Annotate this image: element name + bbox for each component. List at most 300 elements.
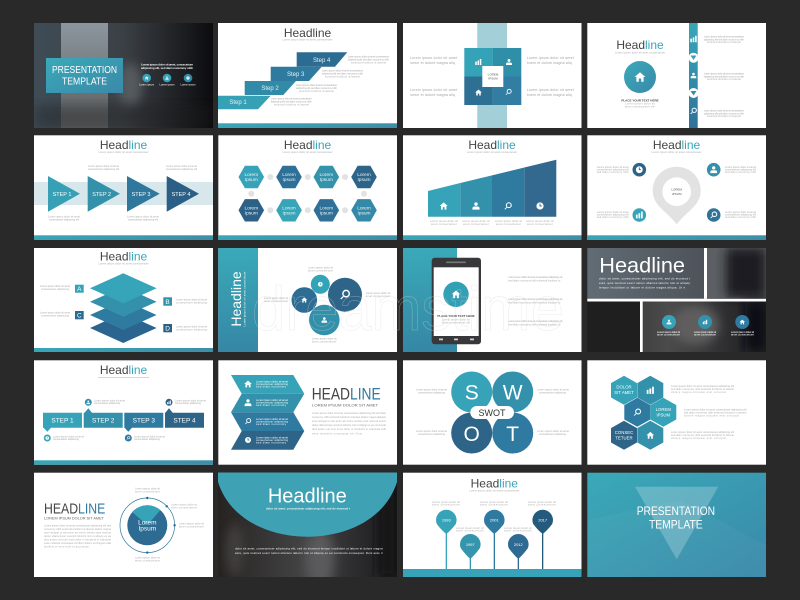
slide 11: phone mockup — [403, 248, 582, 352]
intro text: adipiscing elit, sed diam nonummy nibh — [141, 66, 193, 70]
captions — [671, 384, 747, 440]
paragraph: tation ullamcorper suscipit lobortis nisl ut aliquip ex ea — [44, 534, 112, 538]
paragraph: tation ullamcorper suscipit lobortis nisl ut aliquip ex ea commodo — [312, 423, 387, 427]
side text: Lorem ipsum dolor sit amet — [725, 210, 756, 214]
captions: amet consectetuer — [312, 340, 337, 344]
pin 1997: 1997 — [466, 542, 476, 547]
pin 1993 — [436, 510, 457, 569]
step captions: adipiscing elit sed diam nonummy nibh — [271, 100, 312, 104]
connector dots — [248, 174, 367, 213]
slide 8: map pin — [587, 135, 766, 240]
step 3 triangle: STEP 3 — [132, 192, 150, 198]
pin 2012: 2012 — [514, 542, 524, 547]
step 1 box: STEP 1 — [51, 418, 74, 425]
chevrons: Lorem ipsum dolor sit amet — [256, 380, 288, 384]
step 2 triangle — [88, 176, 120, 212]
captions: consectetuer adipiscing — [41, 314, 70, 318]
step 4 — [297, 52, 347, 67]
step captions — [53, 398, 206, 441]
side text: Lorem ipsum dolor sit amet consectetuer adipiscing elit — [508, 297, 563, 301]
headline panel: anis, quis nostrud exerc tation ullamco laboris nisi ut aliquip — [599, 281, 690, 285]
side text: lorem et dolore magna aliq — [527, 93, 572, 97]
captions: dolore magna aliquam erat volutpat — [671, 390, 726, 394]
captions: amet consectetuer — [264, 299, 288, 303]
headline: Headline — [471, 476, 518, 490]
chevrons: sed diam nonummy — [256, 422, 287, 426]
white dividers — [587, 248, 766, 352]
slide 19: year pins timeline — [403, 473, 582, 577]
side captions: consectetuer adipiscing — [539, 390, 567, 394]
step captions: euismod tincidunt ut laoreet — [299, 89, 334, 93]
phone: amet consectetuer elit — [442, 320, 470, 324]
step captions: euismod tincidunt ut laoreet — [351, 60, 386, 64]
side text: euismod tincidunt ut laoreet — [707, 114, 741, 118]
hexagons: Ipsum — [357, 177, 371, 183]
quadrant block — [464, 48, 521, 105]
side text — [508, 275, 563, 326]
step captions: Lorem ipsum dolor sit amet — [48, 214, 80, 218]
captions: amet consectetuer — [179, 524, 204, 528]
slide 4: home circle with side band — [587, 23, 766, 128]
teal arc headline: Headline — [268, 486, 347, 508]
icon: search — [707, 208, 720, 222]
side text: sed diam nonummy nibh euismod tincidunt ut — [508, 300, 561, 304]
step captions: Lorem ipsum dolor sit amet consectetuer — [322, 68, 363, 72]
step 3 — [271, 67, 322, 81]
captions: sed diam nonummy nibh euismod tincidunt ut laoreet — [671, 433, 734, 437]
step 2 — [245, 81, 296, 95]
side text: euismod tincidunt ut laoreet — [707, 77, 741, 81]
headline: Headline — [468, 138, 516, 152]
O circle — [451, 412, 492, 454]
icon: person — [707, 163, 720, 176]
hexagons: Ipsum — [357, 210, 371, 216]
icons row: Lorem ipsum — [180, 82, 196, 86]
pin captions — [432, 500, 556, 532]
slide 1: presentation template cover — [34, 23, 213, 128]
slide 13: step timeline — [34, 360, 213, 465]
home circle — [624, 61, 656, 93]
watermark: dreamstime — [252, 275, 564, 344]
side text: Lorem ipsum dolor sit amet consectetuer — [704, 108, 744, 112]
body text: anis, quis nostrud exerc tation ullamco laboris nisi ut aliquip ex ea commodo consequat. Duis aute ir — [235, 551, 383, 555]
side text: Lorem ipsum dolor sit amet — [725, 165, 756, 169]
slide 2: stair steps — [218, 23, 397, 128]
captions: consectetuer adipiscing — [176, 328, 208, 332]
headline panel — [587, 248, 704, 299]
hexagons: Lorem — [319, 172, 333, 178]
icon captions: amet consectetuer — [694, 332, 716, 336]
pin 2001: 2001 — [490, 518, 500, 522]
chevrons — [231, 375, 304, 450]
hexagons: Ipsum — [245, 177, 258, 183]
icon captions: amet consectetuer — [657, 332, 680, 336]
icon captions: Lorem ipsum dolor sit — [657, 330, 680, 334]
label C: C — [77, 312, 82, 320]
captions: Lorem ipsum dolor sit amet — [176, 324, 207, 328]
icons row — [139, 74, 196, 86]
captions: Lorem ipsum dolor sit — [462, 219, 490, 223]
captions: sed diam nonummy nibh euismod tincidunt ut laoreet — [684, 410, 747, 414]
headline panel: tempor incididunt ut labore et dolore magna aliqua. Ut e — [599, 286, 685, 290]
paragraph: duis autem vel eum iriure dolor in hendrerit in vulputate velit — [312, 427, 386, 431]
W circle: W — [503, 382, 523, 404]
step icons — [44, 399, 172, 442]
captions: Lorem ipsum dolor sit — [308, 266, 333, 270]
step captions: consectetuer adipiscing — [134, 437, 161, 441]
side captions: Lorem ipsum dolor sit amet — [416, 429, 447, 433]
captions: amet consectetuer — [171, 506, 197, 510]
step 2 triangle: STEP 2 — [92, 192, 111, 198]
hexagons: Lorem — [357, 172, 371, 178]
icon captions — [657, 330, 754, 336]
diamond stack — [90, 273, 157, 343]
headline: HEADLINE — [312, 385, 381, 403]
vertical icon band — [688, 23, 698, 128]
paragraph: esse molestie consequat vel illum — [312, 432, 362, 436]
captions: amet consectetuer — [527, 222, 553, 226]
side text: lorem et dolore magna aliq — [410, 61, 455, 65]
chevrons: Lorem ipsum dolor sit amet — [256, 417, 288, 421]
title box — [46, 58, 123, 93]
side text: Lorem ipsum dolor sit amet — [527, 88, 574, 92]
step captions: Lorem ipsum dolor sit amet consectetuer — [348, 54, 389, 58]
pin 2001 — [484, 510, 505, 569]
pin 1993: 1993 — [442, 518, 452, 522]
paragraph: nonummy nibh euismod tincidunt ut laoreet dolore magna — [44, 527, 112, 531]
captions: Lorem ipsum dolor sit — [366, 291, 390, 295]
caption: PLACE YOUR TEXT HERE — [621, 98, 659, 102]
side captions: consectetuer adipiscing — [418, 390, 446, 394]
captions: amet consectetuer — [431, 222, 457, 226]
side captions: Lorem ipsum dolor sit amet — [537, 429, 569, 433]
icon captions: amet consectetuer — [731, 332, 754, 336]
step captions: adipiscing elit sed diam nonummy nibh — [348, 58, 390, 62]
rising bars — [428, 160, 556, 217]
T circle: T — [506, 423, 519, 446]
side text — [704, 34, 745, 118]
headline: Lorem ipsum dolor sit amet consectetuer — [98, 262, 149, 266]
icon: person — [662, 315, 676, 329]
label C — [75, 311, 84, 320]
label A: A — [77, 286, 82, 293]
step 1 triangle — [48, 176, 80, 212]
captions: consectetuer adipiscing — [176, 300, 208, 304]
headline: Headline — [100, 138, 148, 152]
side text: Lorem ipsum dolor sit amet — [597, 210, 629, 214]
paragraph: erat volutpat ut wisi enim ad minim veniam quis nostrud exerci — [312, 419, 386, 423]
side panel — [218, 248, 258, 352]
quadrant block: LOREM — [488, 72, 499, 76]
step captions: Lorem ipsum dolor sit amet — [134, 434, 165, 438]
closing title: TEMPLATE — [649, 517, 703, 531]
step 2 box: STEP 2 — [92, 418, 115, 425]
ring and pie: Lorem — [138, 519, 157, 526]
honeycomb: TETUER — [615, 436, 633, 440]
step captions: adipiscing elit sed diam nonummy nibh — [296, 86, 338, 90]
side text: adipiscing elit sed diam nonummy nibh — [704, 37, 745, 41]
pin captions: Lorem ipsum dolor sit — [432, 500, 460, 504]
slide 14: chevron list — [218, 360, 397, 465]
step captions: adipiscing elit sed diam nonummy nibh — [322, 72, 364, 76]
captions: Lorem ipsum dolor sit — [495, 219, 522, 223]
step 2 box — [84, 408, 123, 428]
side panel: Headline — [228, 271, 244, 327]
side text: sed diam nonummy nibh — [597, 170, 629, 174]
slide 18: dark photo with teal arc — [218, 472, 397, 577]
icon captions: Lorem ipsum dolor sit — [731, 330, 754, 334]
closing title: PRESENTATION — [637, 504, 715, 518]
step 3 box: STEP 3 — [133, 418, 155, 425]
captions: Lorem ipsum dolor sit — [430, 219, 458, 223]
captions — [40, 284, 208, 332]
phone — [432, 258, 481, 344]
captions: Lorem ipsum dolor sit amet consectetuer adipiscing elit — [684, 408, 747, 412]
pin 1997 — [460, 534, 481, 569]
icons row: Lorem ipsum — [139, 82, 154, 86]
step captions: Lorem ipsum dolor sit amet — [53, 434, 84, 438]
teal arc headline: dolor sit amet, consectetuer adipiscing elit, sed do eiusmod t — [266, 506, 350, 510]
slide 17: circular pie diagram — [34, 473, 213, 577]
title box: TEMPLATE — [62, 76, 107, 88]
honeycomb: LOREM — [656, 407, 671, 412]
slide 6: hexagon grid — [218, 135, 397, 240]
caption: Lorem ipsum dolor sit — [625, 102, 655, 106]
side text: Lorem ipsum dolor sit amet consectetuer — [704, 34, 744, 38]
side captions: consectetuer adipiscing — [418, 432, 446, 436]
step captions — [271, 54, 390, 106]
slide 3: quadrant square — [403, 23, 582, 128]
hexagons — [238, 166, 377, 222]
captions: Lorem ipsum dolor sit — [135, 486, 160, 490]
T circle — [492, 412, 533, 454]
side captions — [416, 388, 569, 436]
step captions: Lorem ipsum dolor sit amet consectetuer — [271, 96, 312, 100]
headline: Headline — [653, 138, 701, 152]
icons row: Lorem ipsum — [160, 82, 174, 86]
captions: Lorem ipsum dolor sit amet — [176, 298, 207, 302]
teal arc headline — [218, 472, 397, 537]
pin 2017 — [532, 510, 553, 569]
step 3 triangle — [127, 176, 160, 212]
chevrons: sed diam nonummy — [256, 403, 287, 407]
circle: person — [309, 305, 340, 335]
step 4 box — [165, 408, 204, 428]
side text: sed diam nonummy nibh euismod tincidunt ut — [508, 278, 561, 282]
headline: Lorem ipsum dolor sit amet consectetuer — [282, 38, 333, 42]
icon captions: Lorem ipsum dolor sit — [694, 330, 716, 334]
captions: Lorem ipsum dolor sit — [135, 556, 160, 560]
captions — [135, 486, 204, 562]
chevrons: sed diam nonummy — [256, 384, 287, 388]
side text: consectetuer adipiscing elit — [725, 168, 756, 172]
side captions: consectetuer adipiscing — [539, 432, 567, 436]
step 3: Step 3 — [287, 72, 305, 78]
side captions: Lorem ipsum dolor sit amet — [537, 388, 569, 392]
step captions: consectetuer adipiscing elit — [88, 167, 119, 171]
phone: PLACE YOUR TEXT HERE — [437, 314, 475, 318]
step 3 box — [124, 413, 163, 432]
captions: Lorem ipsum dolor sit amet consectetuer adipiscing elit — [671, 430, 734, 434]
pin shape: IPSUM — [672, 192, 682, 196]
paragraph — [44, 524, 112, 548]
headline: HEADLINE — [44, 501, 106, 517]
closing title — [637, 504, 715, 531]
step captions: Lorem ipsum dolor sit amet — [88, 164, 119, 168]
step captions: Lorem ipsum dolor sit amet — [94, 398, 125, 402]
captions: Lorem ipsum dolor sit — [526, 219, 554, 223]
paragraph: erat volutpat ut wisi enim ad minim veniam quis nostrud — [44, 530, 112, 534]
caption — [621, 98, 659, 108]
side text: adipiscing elit sed diam nonummy nibh — [704, 74, 745, 78]
hexagons: Lorem — [319, 206, 333, 212]
slide 20: closing presentation template — [587, 473, 766, 577]
captions: consectetuer adipiscing — [41, 287, 70, 291]
step captions: Lorem ipsum dolor sit amet consectetuer — [296, 83, 337, 87]
label D — [163, 324, 172, 332]
headline: LOREM IPSUM DOLOR SIT AMET — [44, 516, 105, 520]
step 1: Step 1 — [229, 100, 247, 106]
side text: sed diam nonummy nibh euismod tincidunt ut — [508, 322, 561, 326]
ring and pie — [120, 497, 176, 554]
slide 12: dark photo headline — [587, 248, 766, 352]
hexagons: Ipsum — [245, 210, 258, 216]
headline: Lorem ipsum dolor sit amet consectetuer — [467, 150, 517, 154]
intro text: Lorem ipsum dolor sit amet, consectetuer — [141, 62, 194, 66]
captions — [430, 219, 554, 226]
headline: Headline — [284, 26, 332, 40]
chevrons: consectetuer adipiscing — [256, 438, 288, 442]
paragraph: Lorem ipsum dolor sit amet consectetuer adipiscing elit sed — [44, 524, 112, 528]
pin captions: Lorem ipsum dolor sit — [480, 500, 508, 504]
S circle: S — [465, 382, 479, 404]
pin captions: Lorem ipsum dolor sit — [528, 500, 556, 504]
label D: D — [165, 326, 170, 332]
step captions: consectetuer adipiscing elit — [166, 167, 197, 171]
slide 7: rising bar chart — [403, 135, 582, 240]
side text: consectetuer adipiscing elit — [597, 212, 629, 216]
step captions: consectetuer adipiscing elit — [49, 218, 79, 222]
captions: Lorem ipsum dolor sit amet consectetuer adipiscing elit — [671, 384, 734, 388]
circle: home — [292, 287, 317, 313]
slide 10: circles cluster — [218, 248, 397, 352]
captions — [264, 266, 390, 344]
paragraph — [312, 411, 387, 436]
chevrons: Lorem ipsum dolor sit amet — [256, 436, 288, 440]
captions: dolore magna aliquam erat volutpat — [684, 414, 739, 418]
side text: sed diam nonummy nibh — [725, 170, 757, 174]
captions: amet consectetuer — [135, 490, 160, 494]
step captions: Lorem ipsum dolor sit amet — [166, 164, 197, 168]
phone: Lorem ipsum dolor sit — [442, 318, 470, 322]
pin captions: Lorem ipsum dolor sit — [504, 526, 532, 530]
headline: Headline — [100, 250, 148, 264]
slide 5: arrow triangles steps — [34, 135, 213, 240]
chevrons: consectetuer adipiscing — [256, 420, 288, 424]
honeycomb: CONSEC — [615, 430, 633, 435]
step captions: consectetuer adipiscing elit — [128, 218, 158, 222]
honeycomb: DOLOR — [616, 384, 632, 390]
pin 2017: 2017 — [538, 518, 548, 522]
step 4 box: STEP 4 — [173, 418, 196, 425]
headline: Headline — [284, 138, 332, 152]
SWOT pill — [470, 406, 514, 419]
side text: lorem et dolore magna aliq — [410, 93, 455, 97]
headline: Headline — [100, 363, 148, 377]
label B — [163, 297, 172, 306]
side text: consectetuer adipiscing elit — [725, 212, 756, 216]
label A — [75, 285, 84, 293]
captions: Lorem ipsum dolor sit amet — [40, 310, 70, 314]
honeycomb: IPSUM — [656, 412, 671, 418]
W circle — [492, 372, 533, 412]
paragraph: esse molestie consequat vel illum dolore eu feugiat nulla — [44, 541, 112, 545]
icon: chart — [698, 315, 712, 329]
pin 2012 — [508, 534, 529, 569]
step captions: Lorem ipsum dolor sit amet — [127, 214, 159, 218]
pin captions: amet consectetuer — [456, 528, 484, 532]
paragraph: facilisis at vero eros et accumsan — [44, 544, 90, 548]
circle: search — [328, 278, 362, 312]
headline: Lorem ipsum dolor sit amet consectetuer — [615, 50, 665, 54]
headline panel: Headline — [599, 252, 685, 277]
side text: euismod tincidunt ut laoreet — [707, 40, 741, 44]
caption: amet consectetuer elit — [625, 104, 655, 108]
body text: dolor sit amet, consectetuer adipiscing elit, sed do eiusmod tempor incididunt ut labore et dolore magna — [235, 546, 383, 550]
headline: Lorem ipsum dolor sit amet consectetuer — [469, 488, 519, 492]
O circle: O — [464, 423, 480, 446]
label B: B — [165, 299, 170, 306]
captions: Lorem ipsum dolor sit amet — [40, 284, 70, 288]
side text: sed diam nonummy nibh — [725, 215, 757, 219]
hexagons: Ipsum — [282, 210, 296, 216]
pin captions: amet consectetuer — [432, 502, 460, 506]
step 1 — [218, 96, 271, 109]
body text — [235, 546, 383, 555]
icon: chart — [632, 208, 646, 222]
headline: Lorem ipsum dolor sit amet consectetuer — [282, 150, 333, 154]
headline: LOREM IPSUM DOLOR SIT AMET — [312, 402, 379, 407]
slide 15: SWOT — [403, 360, 582, 465]
circle: clock — [311, 275, 330, 294]
captions: amet consectetuer — [135, 558, 160, 562]
intro text — [141, 62, 194, 70]
headline: Lorem ipsum dolor sit amet consectetuer — [652, 150, 702, 154]
side text: Lorem ipsum dolor sit amet — [410, 56, 457, 60]
paragraph: duis autem vel eum iriure dolor in hendrerit in vulputate — [44, 538, 112, 542]
hexagons: Lorem — [244, 206, 258, 212]
captions: Lorem ipsum dolor sit — [171, 502, 197, 506]
step captions: Lorem ipsum dolor sit amet — [175, 398, 206, 402]
captions: amet consectetuer — [366, 294, 390, 298]
pin shape: LOREM — [671, 188, 683, 192]
hexagons: Lorem — [282, 172, 296, 178]
S circle — [451, 372, 492, 412]
side text: Lorem ipsum dolor sit amet — [410, 88, 457, 92]
step 2: Step 2 — [261, 86, 279, 92]
hexagons: Lorem — [282, 206, 296, 212]
side text: Lorem ipsum dolor sit amet — [597, 165, 629, 169]
translucent triangle — [635, 487, 718, 559]
paragraph: nonummy nibh euismod tincidunt ut laoreet dolore magna aliquam — [312, 415, 386, 419]
step captions — [48, 164, 197, 222]
side captions: Lorem ipsum dolor sit amet — [416, 388, 447, 392]
side text: Lorem ipsum dolor sit amet — [527, 56, 574, 60]
side text: lorem et dolore magna aliq — [527, 61, 572, 65]
step 4 triangle — [167, 176, 199, 212]
chevrons: Lorem ipsum dolor sit amet — [256, 398, 288, 402]
pin captions: Lorem ipsum dolor sit — [456, 526, 484, 530]
